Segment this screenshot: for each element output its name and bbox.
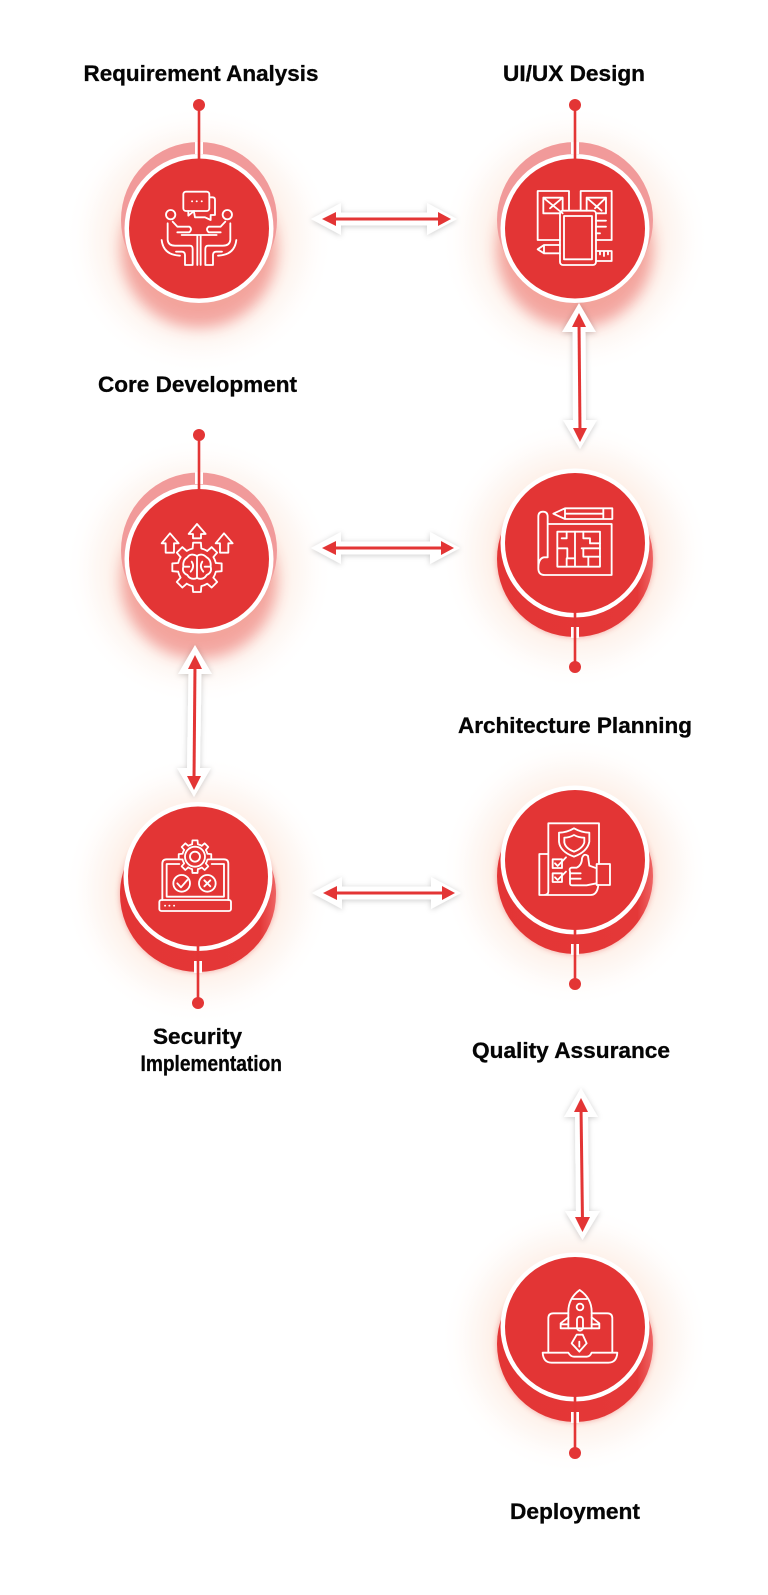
node: Quality Assurance <box>440 737 710 1007</box>
title: Security Implementation: Security <box>153 1024 243 1049</box>
node: Deployment <box>440 1205 710 1475</box>
connector and dot <box>574 105 576 160</box>
icon: blueprint and pencil <box>538 508 612 575</box>
node: Requirement Analysis <box>64 99 334 375</box>
arrow: Quality Assurance to Deployment <box>564 1088 600 1240</box>
icon: laptop gear check <box>159 840 231 911</box>
icon: wireframes and tablet <box>538 191 612 265</box>
title: UI/UX Design: UI/UX Design <box>503 61 645 86</box>
icon: rocket and laptop <box>543 1290 617 1363</box>
connector and dot <box>197 946 199 1003</box>
node: Core Development <box>64 429 334 706</box>
node: Security Implementation <box>63 755 333 1025</box>
title: Security Implementation: Implementation <box>140 1051 282 1076</box>
arrow: Security Implementation to Quality Assurance <box>312 877 461 909</box>
connector and dot <box>198 435 200 490</box>
connector and dot <box>574 612 576 667</box>
connector and dot <box>198 105 200 160</box>
arrow: Requirement Analysis to UI/UX Design <box>311 203 457 235</box>
icon: document shield thumbs up <box>539 823 610 895</box>
node: UI/UX Design <box>440 99 710 375</box>
title: Security Implementation <box>140 1024 282 1076</box>
title: Core Development: Core Development <box>98 372 298 397</box>
icon: meeting at table <box>162 192 236 265</box>
connector and dot <box>574 1396 576 1453</box>
title: Quality Assurance: Quality Assurance <box>472 1038 670 1063</box>
title: Requirement Analysis: Requirement Analysis <box>84 61 318 86</box>
connector and dot <box>574 929 576 984</box>
arrow: Architecture Planning to Core Development <box>311 532 460 564</box>
icon: gear brain with arrows <box>162 524 233 592</box>
title: Deployment: Deployment <box>510 1499 641 1524</box>
arrow: Core Development to Security Implementation <box>177 645 212 797</box>
arrow: UI/UX Design to Architecture Planning <box>562 303 597 449</box>
node: Architecture Planning <box>440 420 710 690</box>
title: Architecture Planning: Architecture Planning <box>458 713 692 738</box>
